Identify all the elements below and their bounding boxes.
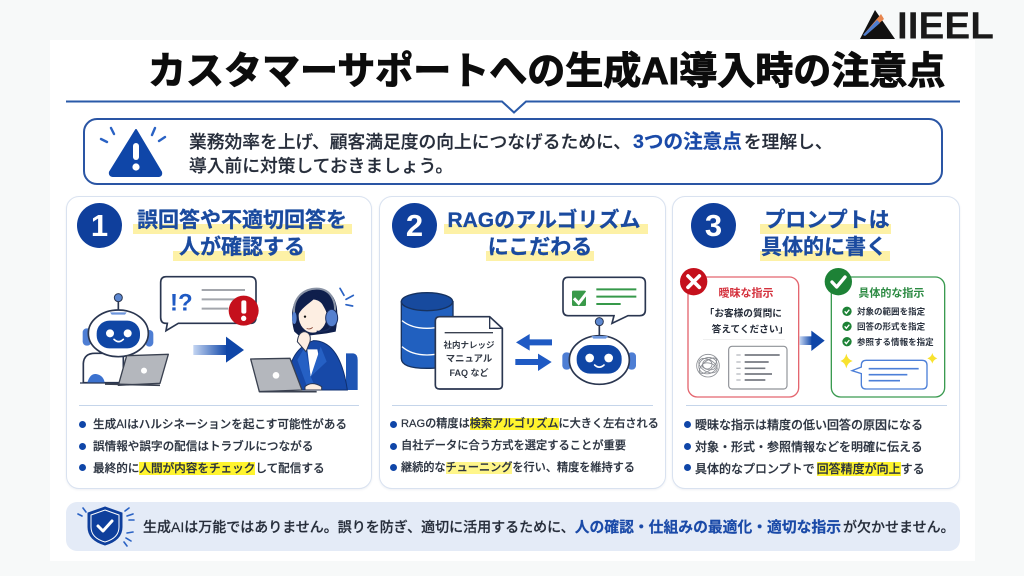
knowledge document (435, 317, 502, 389)
robot laptop (80, 354, 168, 385)
heading 3 (760, 208, 891, 261)
panel: 1 human check (66, 196, 372, 489)
illustration: vague vs specific prompt (680, 268, 946, 398)
heading 3: プロンプトは (764, 209, 890, 232)
bullet list 1 (79, 418, 347, 475)
exchange arrows (515, 334, 552, 371)
knowledge document: 社内ナレッジ (443, 340, 495, 350)
panel: 3 specific prompts (672, 196, 960, 489)
robot (83, 294, 153, 383)
heading 2 (444, 208, 648, 261)
bullet list 2: 継続的なチューニングを行い、精度を維持する (401, 462, 635, 474)
number badge 1: 1 (91, 208, 108, 243)
number badge 3 (691, 203, 736, 248)
heading 1: 誤回答や不適切回答を (137, 209, 347, 232)
specific instruction box: 参照する情報を指定 (857, 337, 934, 347)
illustration: robot to human operator (80, 276, 358, 392)
operator laptop (251, 358, 322, 392)
bullet list 1: 生成AIはハルシネーションを起こす可能性がある (93, 418, 347, 431)
heading 2: RAGのアルゴリズム (447, 209, 641, 232)
bullet list 1: 誤情報や誤字の配信はトラブルにつながる (93, 440, 313, 453)
specific instruction box: 対象の範囲を指定 (857, 307, 926, 317)
vague instruction box: 曖昧な指示 (718, 285, 773, 299)
number badge 2 (392, 203, 437, 248)
answer bubble (563, 277, 645, 323)
knowledge document: マニュアル (446, 354, 493, 364)
title: カスタマーサポートへの生成AI導入時の注意点 (148, 51, 945, 93)
heading 1 (133, 208, 352, 261)
speech bubble with error (161, 277, 259, 331)
heading 3: 具体的に書く (761, 236, 887, 259)
bullet list 2: 自社データに合う方式を選定することが重要 (401, 440, 626, 452)
logo: IIEEL (897, 6, 994, 48)
footer text: 生成AIは万能ではありません。誤りを防ぎ、適切に活用するために、人の確認・仕組みの最適化・適切な指示が欠かせません。 (143, 519, 955, 536)
vague instruction box: 「お客様の質問に (705, 308, 782, 320)
panel: 2 RAG algorithm (379, 196, 666, 489)
speech bubble with error: !? (170, 290, 193, 317)
arrow (193, 337, 244, 363)
intro text: 業務効率を上げ、顧客満足度の向上につなげるために、3つの注意点を理解し、 (189, 131, 833, 153)
knowledge document: FAQ など (449, 367, 489, 378)
intro callout (83, 118, 943, 185)
bullet list 3: 具体的なプロンプトで回答精度が向上する (695, 462, 925, 476)
icon: warning triangle (100, 126, 166, 177)
title underline with notch (66, 100, 960, 114)
bullet list 3: 曖昧な指示は精度の低い回答の原因になる (695, 418, 923, 432)
intro text: 導入前に対策しておきましょう。 (189, 156, 453, 176)
database (401, 293, 453, 368)
bullet list 3 (684, 418, 925, 476)
number badge 1 (77, 203, 122, 248)
intro text (189, 131, 833, 176)
illustration: database, document and robot (400, 276, 646, 390)
specific instruction box: 具体的な指示 (858, 285, 924, 299)
vague instruction box (680, 268, 799, 397)
icon: shield with check (77, 506, 135, 547)
specific instruction box: 回答の形式を指定 (857, 322, 926, 332)
bullet list 1: 最終的に人間が内容をチェックして配信する (93, 462, 325, 475)
arrow (800, 331, 825, 351)
bullet list 2 (390, 416, 659, 474)
footer summary band (66, 502, 960, 551)
bullet list 3: 対象・形式・参照情報などを明確に伝える (695, 440, 923, 454)
support operator (287, 288, 358, 390)
robot (562, 318, 636, 384)
number badge 3: 3 (705, 208, 722, 243)
specific instruction box (825, 268, 945, 397)
bullet list 2: RAGの精度は検索アルゴリズムに大きく左右される (401, 418, 659, 430)
heading 1: 人が確認する (179, 236, 305, 259)
vague instruction box: 答えてください」 (712, 324, 788, 336)
number badge 2: 2 (406, 208, 423, 243)
heading 2: にこだわる (488, 236, 592, 259)
